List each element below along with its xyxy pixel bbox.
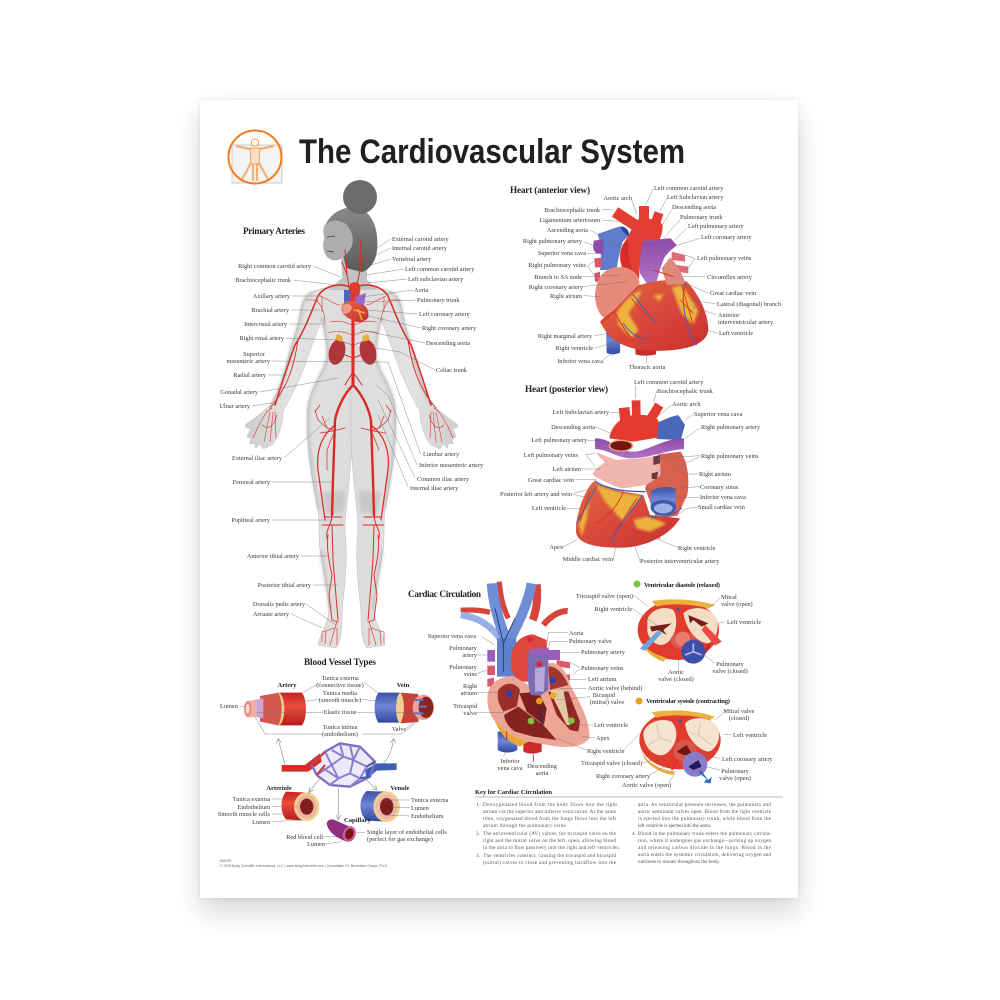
labels: blood vessels: (connective tissue) [316,682,364,689]
labels: blood vessels: Tunica media [323,690,357,697]
venule [360,791,400,822]
labels: cardiac circulation: (mitral) valve [590,699,624,706]
labels: ventricular diastole and systole: Tricuspid valve (closed) [581,760,642,767]
key for cardiac circulation: 3. [476,853,480,859]
labels: heart posterior: Inferior vena cava [700,494,746,501]
labels: cardiac circulation: Right ventricle [587,748,625,755]
labels: cardiac circulation: vena cava [498,765,523,772]
kidneys [326,334,379,367]
labels: primary arteries, right side: Left common carotid artery [405,266,475,273]
face [323,220,353,260]
labels: blood vessels: Tunica externa [321,675,359,682]
labels: cardiac circulation: Aortic valve (behind) [588,685,642,692]
labels: heart anterior: Left pulmonary veins [697,255,752,262]
labels: heart posterior: Left pulmonary artery [531,437,588,444]
labels: heart anterior: Pulmonary trunk [680,214,723,221]
labels: heart posterior: Left atrium [552,466,581,473]
epicardial fat [617,285,698,338]
labels: primary arteries, right side: Descending aorta [426,340,470,347]
labels: heart posterior: Descending aorta [551,424,595,431]
key for cardiac circulation: tion, where it undergoes gas exchange—picking up oxygen [638,838,771,844]
labels: blood vessels: Capillary [344,817,371,824]
labels: primary arteries, right side: Internal carotid artery [392,245,448,252]
labels: heart posterior [500,379,761,565]
labels: blood vessels: Lumen [220,703,239,710]
labels: ventricular diastole and systole: (closed) [729,715,749,722]
labels: heart posterior: Right pulmonary veins [701,453,759,460]
heading: primary arteries: Primary Arteries [243,226,305,236]
pulmonary artery band [595,438,684,458]
labels: ventricular diastole and systole: Left ventricle [733,732,767,739]
labels: heart anterior: interventricular artery [718,319,774,326]
labels: ventricular diastole and systole [576,580,774,789]
key for cardiac circulation: The ventricles contract, causing the tricuspid and bicuspid [483,853,616,859]
labels: blood vessels: Lumen [307,841,326,848]
labels: heart anterior: Ascending aorta [547,227,588,234]
labels: ventricular diastole and systole: valve (closed) [658,676,694,683]
labels: blood vessels: (endothelium) [322,731,358,738]
inferior vena cava and descending aorta [498,732,517,752]
aortic arch and branches [615,206,659,232]
ventricles [576,482,680,548]
labels: heart anterior: Thoracic aorta [629,364,665,371]
labels: ventricular diastole and systole: Aortic valve (open) [622,782,671,789]
labels: cardiac circulation: Bicuspid [593,692,616,699]
labels: heart posterior: Posterior interventricular artery [640,558,720,565]
labels: cardiac circulation: Left atrium [588,676,617,683]
labels: heart posterior: Aortic arch [672,401,701,408]
labels: heart posterior: Left pulmonary veins [524,452,579,459]
labels: heart anterior: Right atrium [550,293,582,300]
labels: heart anterior: Superior vena cava [538,250,586,257]
labels: heart anterior: Right ventricle [555,345,593,352]
hair and bun [324,207,377,272]
heading: heart posterior: Heart (posterior view) [525,384,608,394]
poster sheet [200,100,798,898]
key for cardiac circulation: The atrioventricular (AV) valves, the tricuspid valve on the [483,830,617,837]
labels: heart anterior: Left coronary artery [701,234,753,241]
labels: heart anterior: Right pulmonary artery [523,238,583,245]
pulmonary arteries and veins [487,650,495,662]
labels: primary arteries, right side: Inferior mesenteric artery [419,462,484,469]
right atrium [595,267,639,317]
labels: primary arteries, left side: Popliteal artery [231,517,271,524]
key for cardiac circulation: 1. [476,802,480,808]
fat band [494,718,528,747]
labels: heart posterior: Right ventricle [678,545,716,552]
labels: blood vessels: (perfect for gas exchange) [367,836,433,843]
labels: ventricular diastole and systole: Ventricular systole (contracting) [646,698,730,705]
labels: primary arteries, left side: Arcuate artery [253,611,290,618]
labels: blood vessels: Tunica externa [411,797,449,804]
key for cardiac circulation: right and the mitral valve on the left, open, allowing blood [483,837,616,844]
labels: heart anterior: Left pulmonary artery [688,223,744,230]
labels: primary arteries, right side: Common iliac artery [417,476,470,483]
labels: heart posterior: Left common carotid artery [634,379,704,386]
labels: heart anterior: Ligamentum arteriosum [539,217,600,224]
labels: cardiac circulation: Pulmonary [449,664,478,671]
labels: heart posterior: Right pulmonary artery [701,424,761,431]
superior vena cava [598,226,629,270]
labels: primary arteries, right side: Pulmonary trunk [417,297,460,304]
labels: heart posterior: Middle cardiac vein [563,556,614,563]
labels: heart posterior: Left Subclavian artery [553,409,610,416]
labels: cardiac circulation: Right [463,683,477,690]
labels: heart posterior: Small cardiac vein [698,504,746,511]
aortic branches [624,400,659,430]
labels: primary arteries, left side: Radial artery [233,372,267,379]
labels: blood vessels: Red blood cell [286,834,323,841]
labels: heart posterior: Superior vena cava [694,411,742,418]
labels: blood vessels: Arteriole [266,785,292,792]
key for cardiac circulation: aortic semilunar valves open. Blood from the right ventricle [638,808,772,815]
arrows [276,738,396,820]
labels: ventricular diastole and systole: Left ventricle [727,619,761,626]
capillary bed [282,743,397,787]
artery cross-section [244,693,306,725]
labels: heart anterior: Right coronary artery [529,284,584,291]
labels: heart posterior: Posterior left artery and vein [500,491,573,498]
labels: ventricular diastole and systole: Aortic [668,669,684,676]
labels: ventricular diastole and systole: Left coronary artery [722,756,774,763]
labels: cardiac circulation: valve [463,710,477,717]
labels: heart anterior: Great cardiac vein [710,290,757,297]
arteries, left half [253,285,353,645]
labels: heart posterior: Great cardiac vein [528,477,575,484]
labels: heart anterior [523,185,782,371]
labels: primary arteries, left side: Anterior tibial artery [247,553,300,560]
labels: primary arteries, left side: External iliac artery [232,455,283,462]
labels: ventricular diastole and systole: Pulmonary [721,768,750,775]
pulmonary trunk [640,238,677,283]
labels: ventricular diastole and systole: valve (open) [719,775,751,782]
key for cardiac circulation: aorta enters the systemic circulation, delivering oxygen and [638,852,771,858]
labels: cardiac circulation [428,630,642,777]
labels: primary arteries, right side: Lumbar artery [423,451,460,458]
labels: cardiac circulation: Left ventricle [594,722,628,729]
labels: cardiac circulation: Pulmonary [449,645,478,652]
labels: ventricular diastole and systole: valve (closed) [712,668,748,675]
labels: heart anterior: Anterior [718,312,740,319]
illustration: heart posterior view [576,400,688,548]
coronary vessels [602,270,673,340]
vein cross-section [375,693,434,723]
labels: heart anterior: Inferior vena cava [557,358,603,365]
aorta body [620,219,663,278]
labels: ventricular diastole and systole: Mitral [721,594,737,601]
key for cardiac circulation: 2. [476,831,480,837]
arteries, right half [353,285,453,645]
labels: heart posterior: Left ventricle [532,505,566,512]
labels: blood vessels: Venule [390,785,410,792]
capillary [327,819,358,844]
title: The Cardiovascular System [299,133,685,171]
left pulmonary veins [672,252,688,273]
labels: primary arteries, right side: Left coronary artery [419,311,471,318]
labels: cardiac circulation: veins [464,671,478,678]
labels: ventricular diastole and systole: Mitral valve [724,708,755,715]
labels: heart anterior: Branch to SA node [534,274,582,281]
labels: primary arteries, left side: Intercostal artery [244,321,288,328]
ventricles [600,280,708,351]
labels: ventricular diastole and systole: Pulmonary [716,661,745,668]
labels: primary arteries, left side: Gonadal artery [220,389,259,396]
veins and coronary arteries [595,481,645,492]
labels: ventricular diastole and systole: Right ventricle [594,606,632,613]
key for cardiac circulation: 4. [632,831,636,837]
labels: heart posterior: Brachiocephalic trunk [657,388,714,395]
labels: blood vessels: (smooth muscle) [319,697,361,704]
key for cardiac circulation [475,789,783,866]
pulmonary vessels behind [461,582,568,625]
illustration: heart anterior view [593,206,708,356]
epicardial fat [579,485,667,537]
labels: heart anterior: Brachiocephalic trunk [544,207,601,214]
arteriole [281,792,319,821]
labels: heart anterior: Left common carotid artery [654,185,724,192]
labels: cardiac circulation: atrium [461,690,477,697]
labels: ventricular diastole and systole: Right coronary artery [596,773,651,780]
labels: cardiac circulation: Tricuspid [453,703,478,710]
illustration: blood vessels [244,693,434,844]
labels: cardiac circulation: Pulmonary valve [569,638,612,645]
left atrial appendage [662,257,685,285]
chamber numbers [506,636,575,724]
labels: blood vessels: Valve [392,726,406,733]
labels: cardiac circulation: Superior vena cava [428,633,476,640]
inferior vena cava and thoracic aorta [606,327,621,354]
labels: heart posterior: Right atrium [699,471,731,478]
labels: blood vessels: Tunica externa [233,796,270,803]
labels: primary arteries, right side: Celiac trunk [436,367,468,374]
labels: heart anterior: Aortic arch [604,195,633,202]
labels: primary arteries, right side: Internal iliac artery [410,485,459,492]
labels: ventricular diastole and systole: Ventricular diastole (relaxed) [644,582,720,589]
labels: heart anterior: Right marginal artery [538,333,593,340]
superior vena cava [655,415,685,440]
labels: primary arteries, left side: Axillary artery [253,293,291,300]
labels: primary arteries, right side: Aorta [414,287,429,294]
key for cardiac circulation: atria. As ventricular pressure increases, the pulmonary and [638,802,771,808]
aortic opening [609,440,633,452]
labels: primary arteries, right side: Right coronary artery [422,325,477,332]
labels: primary arteries, left side: Ulnar artery [219,403,251,410]
labels: ventricular diastole and systole: valve (open) [721,601,753,608]
labels: cardiac circulation: Aorta [569,630,584,637]
labels: blood vessels: Tunica intima [323,724,358,731]
shaded knees [322,490,381,514]
labels: blood vessels [218,675,449,848]
labels: cardiac circulation: Descending [527,763,558,770]
labels: cardiac circulation: Pulmonary veins [581,665,624,672]
labels: heart anterior: Circumflex artery [707,274,753,281]
labels: primary arteries, right side: Left subclavian artery [408,276,464,283]
labels: primary arteries, left side: Posterior tibial artery [257,582,312,589]
labels: blood vessels: Elastic tissue [323,709,357,716]
labels: blood vessels: Smooth muscle cells [218,811,271,818]
illustration: ventricular systole [623,710,732,783]
labels: primary arteries, right side: Vertebral artery [392,256,432,263]
labels: primary arteries, right side: External carotid artery [392,236,449,243]
key for cardiac circulation: Blood in the pulmonary trunk enters the pulmonary circula- [638,831,771,837]
key for cardiac circulation: Key for Cardiac Circulation [475,789,552,796]
labels: primary arteries, right side [360,236,484,492]
labels: heart anterior: Lateral (diagonal) branch [717,301,782,308]
left atrium [593,452,661,488]
labels: cardiac circulation: Inferior [500,758,521,765]
key for cardiac circulation: (mitral) valves to close and preventing backflow into the [483,859,617,866]
labels: cardiac circulation: artery [462,652,478,659]
labels: heart anterior: Descending aorta [672,204,716,211]
key for cardiac circulation: Deoxygenated blood from the body flows into the right [483,801,618,808]
left atrium and ventricle chambers [548,667,568,690]
heading: cardiac circulation: Cardiac Circulation [408,589,481,599]
labels: blood vessels: Single layer of endothelial cells [367,829,447,836]
labels: primary arteries, left side: Superior [243,351,266,358]
labels: ventricular diastole and systole: Tricuspid valve (open) [576,593,633,600]
footer credits: © 2025 Body Scientific International, LLC | www.BodyScientific.com | Consultant: Dr. Benedicta Gueye, Ph.D. [220,864,388,868]
labels: primary arteries, left side: Right renal artery [240,335,285,342]
labels: heart anterior: Right pulmonary veins [528,262,587,269]
labels: heart anterior: Left ventricle [719,330,753,337]
key for cardiac circulation: nutrients to tissues throughout the body. [638,859,720,865]
labels: blood vessels: Lumen [411,805,430,812]
labels: heart posterior: Apex [549,544,564,551]
footer credits: 800019 [220,859,231,863]
neck [328,252,378,290]
key for cardiac circulation: time, oxygenated blood from the lungs flows into the left [483,815,617,822]
key for cardiac circulation: atrium via the superior and inferior vena cavae. At the same [483,808,617,815]
labels: cardiac circulation: aorta [536,770,548,777]
heading: heart anterior: Heart (anterior view) [510,185,590,195]
labels: primary arteries, left side: Right common carotid artery [238,263,312,270]
key for cardiac circulation: is ejected into the pulmonary trunk, while blood from the [638,815,772,822]
labels: primary arteries, left side: Brachiocephalic trunk [235,277,292,284]
labels: blood vessels: Endothelium [411,813,444,820]
inferior vena cava [651,487,676,514]
heart outer wall [487,663,589,747]
labels: primary arteries, left side: mesenteric artery [226,358,271,365]
labels: blood vessels: Vein [397,682,410,689]
labels: primary arteries, left side: Dorsalis pedis artery [253,601,306,608]
human figure with arteries [245,180,458,648]
pulmonary trunk [528,649,548,696]
key for cardiac circulation: and releasing carbon dioxide in the lungs. Blood in the [638,845,772,851]
figure silhouette [245,272,458,648]
illustration: ventricular diastole [632,595,725,670]
aorta and neck arteries [352,300,354,385]
key for cardiac circulation: in the atria to flow passively into the right and left ventricles. [483,844,620,851]
labels: primary arteries, left side: Brachial artery [251,307,290,314]
aortic arch [609,415,658,442]
footer credits [220,859,388,868]
logo: Vitruvian figure [228,130,282,184]
labels: primary arteries, left side: Femoral artery [233,479,271,486]
labels: blood vessels: Lumen [252,819,271,826]
heading: blood vessel types: Blood Vessel Types [304,657,376,667]
key for cardiac circulation: left ventricle is ejected into the aorta. [638,822,711,829]
labels: cardiac circulation: Apex [596,735,610,742]
key for cardiac circulation: atrium through the pulmonary veins. [483,823,567,829]
labels: heart anterior: Left Subclavian artery [667,194,724,201]
labels: cardiac circulation: Pulmonary artery [581,649,626,656]
labels: primary arteries, left side [219,263,421,628]
great veins [461,583,532,677]
right pulmonary artery and veins [593,239,603,254]
illustration: cardiac circulation [461,582,589,762]
labels: blood vessels: Endothelium [237,804,270,811]
labels: blood vessels: Artery [277,682,297,689]
aorta [511,634,547,682]
small heart [341,282,369,322]
soft shading on limbs and torso [272,292,431,610]
right atrium and ventricle chambers [498,684,520,712]
right atrium [645,452,688,519]
labels: heart posterior: Coronary sinus [700,484,739,491]
